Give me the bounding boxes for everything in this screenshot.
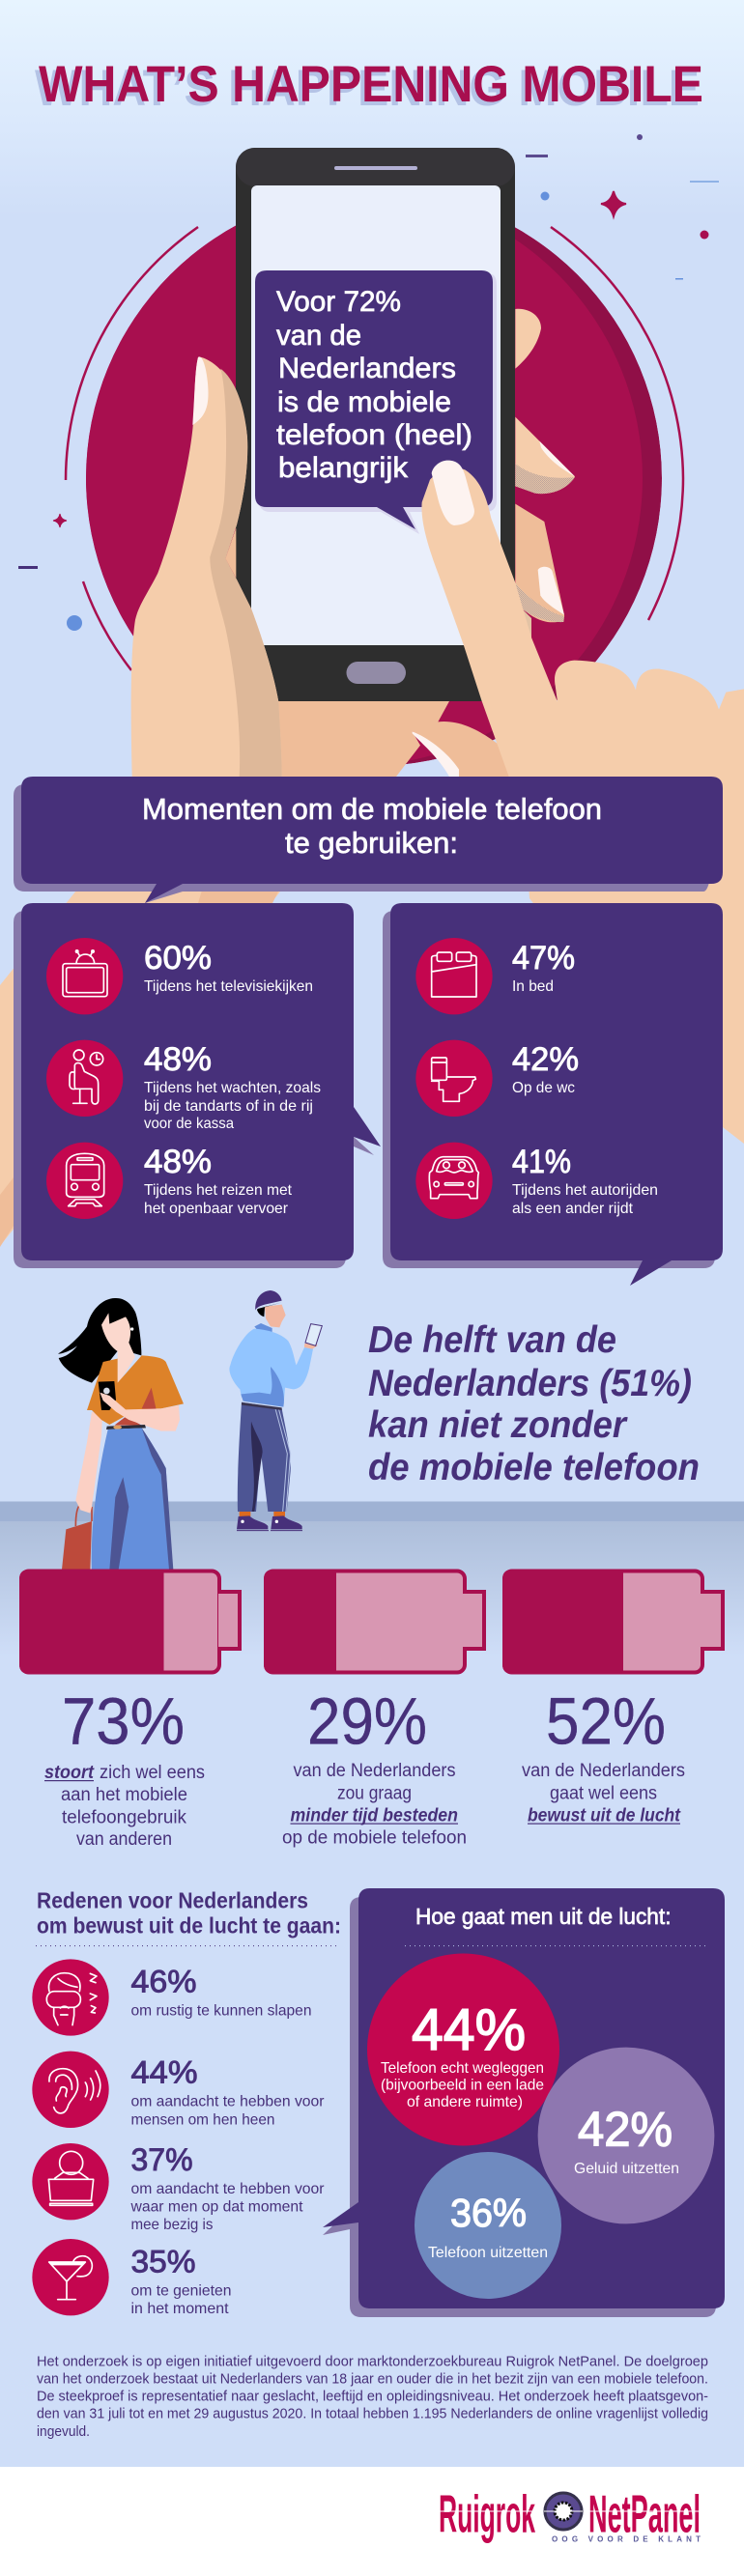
- stat: 29%: zou graag: [337, 1783, 412, 1804]
- methodology note: De steekproef is representatief naar geslacht, leeftijd en opleidingsniveau. Het onderzoek heeft plaatsgevon-: [37, 2390, 708, 2405]
- icon circle: cocktail: [32, 2239, 109, 2315]
- bubble: 44%: of andere ruimte): [407, 2094, 523, 2110]
- speech bubble: 72%: Voor 72%: [276, 286, 401, 318]
- bubble: 44%: (bijvoorbeeld in een lade: [381, 2078, 544, 2094]
- reason: attention people: mensen om hen heen: [131, 2111, 274, 2128]
- text: 42%: 42%: [512, 1041, 579, 1078]
- bubble: 42%: 42%: [578, 2102, 672, 2156]
- text: 48% waiting: voor de kassa: [144, 1116, 234, 1132]
- logo: Ruigrok NetPanel: Ruigrok: [439, 2484, 535, 2544]
- text: 48% transit: [144, 1144, 293, 1217]
- methodology note: [37, 2355, 708, 2440]
- stat: 52%: bewust uit de lucht: [528, 1806, 681, 1826]
- icon circle: bed: [415, 938, 493, 1014]
- stat: 52%: van de Nederlanders: [522, 1761, 685, 1781]
- speech bubble: 72%: is de mobiele: [277, 386, 451, 418]
- reason: attention people: 44%: [131, 2055, 197, 2090]
- panel: moments left: [14, 903, 381, 1268]
- floor band: [0, 1501, 744, 1656]
- panel: moments heading: [14, 777, 723, 903]
- text: 48% transit: Tijdens het reizen met: [144, 1182, 293, 1199]
- reason: attention task: 37%: [131, 2142, 193, 2177]
- red disc behind phone: [67, 190, 662, 766]
- panel: moments heading: Momenten om de mobiele telefoon: [142, 792, 602, 826]
- stat: 73%: telefoongebruik: [62, 1807, 186, 1827]
- stat: 29%: van de Nederlanders: [294, 1761, 456, 1781]
- logo: Ruigrok NetPanel: OOG VOOR DE KLANT: [552, 2535, 701, 2544]
- panel: moments right: [383, 903, 723, 1286]
- reason: enjoy the moment: 35%: [131, 2245, 195, 2279]
- text: 47%: 47%: [512, 940, 575, 977]
- icon circle: waiting person: [46, 1040, 123, 1117]
- text: 48% transit: 48%: [144, 1144, 212, 1180]
- reason: sleep: om rustig te kunnen slapen: [131, 2003, 311, 2020]
- battery 2: 29%: [264, 1570, 484, 1674]
- methodology note: Het onderzoek is op eigen initiatief uitgevoerd door marktonderzoekbureau Ruigrok NetPanel. De doelgroep: [37, 2355, 708, 2370]
- reason: sleep: [32, 1959, 311, 2036]
- reason: enjoy the moment: [32, 2239, 232, 2317]
- bubble: 44%: [367, 1953, 559, 2146]
- text: 60%: 60%: [144, 940, 212, 977]
- speech bubble: 72%: belangrijk: [278, 452, 409, 484]
- illustration: man with phone: [229, 1290, 322, 1531]
- bubble: 36%: 36%: [450, 2191, 527, 2235]
- text: 41%: [512, 1144, 658, 1217]
- text: 48% waiting: 48%: [144, 1041, 212, 1078]
- battery 1: 73%: [19, 1570, 240, 1674]
- panel: how people disconnect: Hoe gaat men uit de lucht:: [415, 1904, 671, 1929]
- icon circle: sleep mask: [32, 1959, 109, 2036]
- heading: reasons: [36, 1888, 341, 1946]
- stat: 29%: [282, 1684, 467, 1848]
- stat: 52%: gaat wel eens: [550, 1783, 657, 1804]
- bubble: 44%: Telefoon echt wegleggen: [381, 2060, 544, 2077]
- text: 47%: In bed: [512, 978, 554, 995]
- bubble: 42%: Geluid uitzetten: [574, 2161, 679, 2177]
- methodology note: van het onderzoek bestaat uit Nederlanders van 18 jaar en ouder die in het bezit zijn van een mobiele telefoon.: [37, 2371, 708, 2387]
- stat: 52%: [522, 1684, 685, 1826]
- text: 48% waiting: [144, 1041, 321, 1132]
- text: 41%: als een ander rijdt: [512, 1201, 634, 1217]
- icon circle: television: [46, 938, 123, 1014]
- text: 41%: Tijdens het autorijden: [512, 1182, 658, 1199]
- stat: 52%: 52%: [546, 1684, 666, 1759]
- bubble: 36%: Telefoon uitzetten: [428, 2245, 548, 2261]
- icon circle: toilet: [415, 1040, 493, 1117]
- stat: 73%: van anderen: [76, 1829, 172, 1850]
- heading: reasons: Redenen voor Nederlanders: [37, 1888, 308, 1913]
- stat: 29%: minder tijd besteden: [290, 1806, 458, 1826]
- hand: left thumb: [131, 356, 282, 777]
- text: 48% transit: het openbaar vervoer: [144, 1201, 289, 1217]
- stat: 73%: zich wel eens: [100, 1763, 205, 1783]
- heading: reasons: om bewust uit de lucht te gaan:: [37, 1912, 341, 1938]
- text: 48% waiting: bij de tandarts of in de rij: [144, 1098, 313, 1115]
- statement: half of the Dutch: [368, 1319, 700, 1488]
- text: 60%: [144, 940, 313, 995]
- footer band: [0, 2467, 744, 2576]
- reason: attention people: [32, 2052, 325, 2128]
- speech bubble: 72%: [255, 270, 497, 534]
- hand: index finger: [421, 461, 744, 777]
- stat: 73%: aan het mobiele: [61, 1785, 187, 1805]
- methodology note: den van 31 juli tot en met 29 augustus 2020. In totaal hebben 1.195 Nederlanders de online vragenlijst volledig: [37, 2407, 708, 2422]
- text: 48% waiting: Tijdens het wachten, zoals: [144, 1080, 321, 1096]
- icon circle: laptop person: [32, 2143, 109, 2220]
- speech bubble: 72%: Nederlanders: [278, 353, 456, 384]
- statement: half of the Dutch: de mobiele telefoon: [368, 1447, 700, 1488]
- icon circle: train: [46, 1143, 123, 1219]
- icon circle: car: [415, 1143, 493, 1219]
- bubble: 44%: 44%: [412, 1997, 526, 2062]
- hand: fingers behind the phone: [277, 309, 575, 777]
- bubble: 42%: [538, 2048, 714, 2223]
- methodology note: ingevuld.: [37, 2424, 90, 2440]
- battery 3: 52%: [502, 1570, 723, 1674]
- reason: attention task: mee bezig is: [131, 2217, 213, 2233]
- statement: half of the Dutch: Nederlanders (51%): [368, 1363, 692, 1404]
- text: 60%: Tijdens het televisiekijken: [144, 978, 313, 995]
- reason: enjoy the moment: in het moment: [131, 2301, 229, 2317]
- text: 47%: [512, 940, 575, 995]
- text: 41%: 41%: [512, 1144, 571, 1180]
- statement: half of the Dutch: De helft van de: [368, 1319, 616, 1361]
- text: 42%: [512, 1041, 579, 1096]
- stat: 73%: 73%: [62, 1684, 185, 1759]
- arms continuing behind panels: [0, 777, 744, 1247]
- phone: [236, 148, 515, 701]
- bubble: 36%: [415, 2152, 561, 2299]
- stat: 73%: stoort: [44, 1763, 95, 1783]
- reason: attention people: om aandacht te hebben voor: [131, 2094, 325, 2110]
- reason: attention task: [32, 2142, 325, 2233]
- reason: attention task: om aandacht te hebben voor: [131, 2181, 325, 2197]
- stat: 29%: op de mobiele telefoon: [282, 1827, 467, 1848]
- title: WHAT’S HAPPENING MOBILE: [35, 60, 700, 117]
- speech bubble: 72%: van de: [276, 320, 361, 352]
- decorative sparkles and dots: [18, 134, 719, 631]
- panel: how people disconnect: [323, 1888, 725, 2317]
- stat: 73%: [44, 1684, 205, 1850]
- motion arcs: [66, 227, 683, 670]
- reason: attention task: waar men op dat moment: [130, 2199, 303, 2216]
- reason: enjoy the moment: om te genieten: [131, 2283, 232, 2300]
- panel: moments heading: te gebruiken:: [285, 826, 458, 860]
- icon circle: ear: [32, 2052, 109, 2128]
- illustration: woman with phone: [58, 1298, 184, 1570]
- statement: half of the Dutch: kan niet zonder: [368, 1404, 628, 1446]
- reason: sleep: 46%: [131, 1965, 197, 1999]
- speech bubble: 72%: telefoon (heel): [276, 419, 472, 451]
- text: 42%: Op de wc: [512, 1080, 575, 1096]
- stat: 29%: 29%: [307, 1684, 427, 1759]
